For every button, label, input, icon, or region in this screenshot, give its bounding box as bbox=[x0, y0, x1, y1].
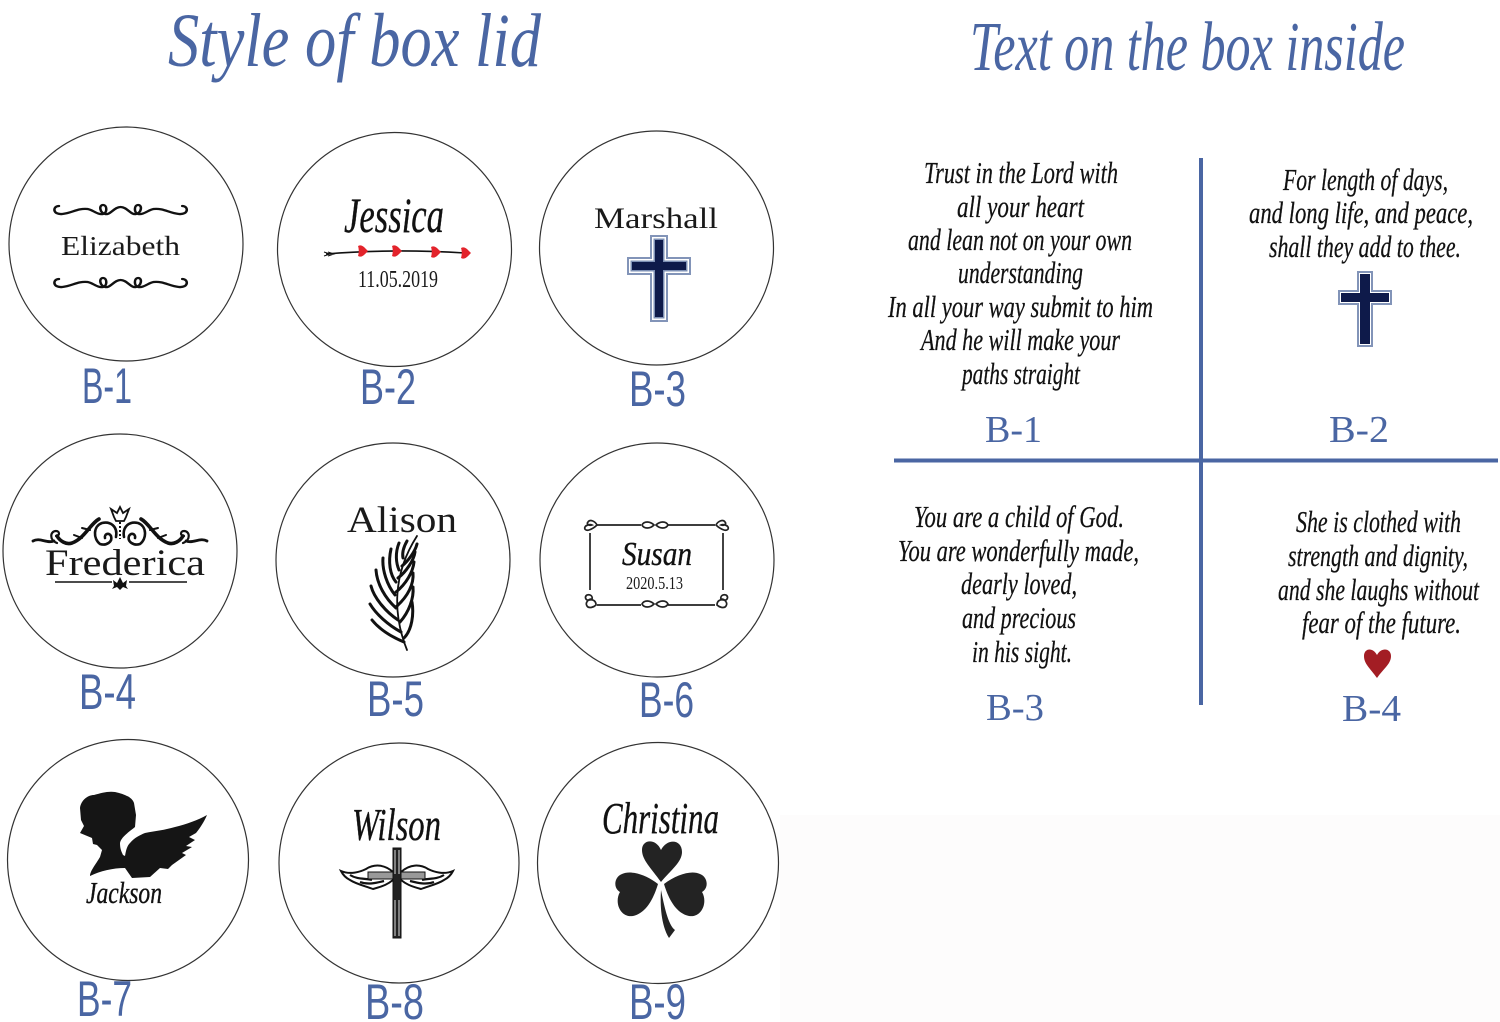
name: Susan bbox=[622, 536, 692, 573]
left wing bbox=[341, 866, 393, 889]
right wing bbox=[401, 866, 453, 889]
lid circle bbox=[3, 434, 237, 668]
verse text: and lean not on your own bbox=[908, 222, 1132, 257]
verse text bbox=[1249, 162, 1473, 264]
icon: angel silhouette bbox=[80, 792, 207, 878]
panel: verse B-2 bbox=[1249, 162, 1473, 451]
panel: lid B-2 bbox=[278, 132, 512, 415]
name: Christina bbox=[602, 794, 719, 843]
panel: lid B-4 bbox=[3, 434, 237, 720]
verse text: dearly loved, bbox=[961, 566, 1077, 601]
panel: verse B-1 bbox=[887, 155, 1153, 451]
bottom flourish bbox=[54, 278, 187, 287]
icon: shamrock bbox=[615, 841, 707, 938]
verse text: paths straight bbox=[961, 356, 1081, 391]
verse text: You are wonderfully made, bbox=[898, 533, 1139, 568]
panel: verse B-3 bbox=[898, 499, 1139, 729]
crown and dots bbox=[111, 507, 129, 539]
icon: palm leaf bbox=[370, 536, 417, 650]
label: B-2 bbox=[360, 359, 416, 415]
feather lines bbox=[350, 875, 444, 884]
verse text: You are a child of God. bbox=[914, 499, 1124, 534]
panel: lid B-5 bbox=[276, 443, 510, 727]
lid circle bbox=[279, 743, 519, 983]
label: B-1 bbox=[985, 409, 1042, 451]
label: B-2 bbox=[1329, 409, 1389, 451]
name: Elizabeth bbox=[61, 231, 181, 261]
icon: cross bbox=[627, 235, 691, 322]
panel: lid B-1 bbox=[9, 127, 243, 414]
name: Frederica bbox=[45, 543, 205, 584]
panel: lid B-6 bbox=[540, 443, 774, 728]
verse text: And he will make your bbox=[920, 322, 1121, 357]
verse text: Trust in the Lord with bbox=[924, 155, 1118, 190]
panel: verse B-4 bbox=[1278, 504, 1480, 730]
panel: lid B-3 bbox=[540, 131, 774, 417]
verse text: all your heart bbox=[957, 189, 1085, 224]
name: Jessica bbox=[344, 187, 444, 243]
label: B-1 bbox=[82, 358, 132, 414]
name: Wilson bbox=[352, 799, 441, 850]
faint off-white lower right area bbox=[780, 815, 1500, 1022]
name: Alison bbox=[347, 500, 457, 541]
verse text: understanding bbox=[958, 255, 1083, 290]
verse text: In all your way submit to him bbox=[887, 289, 1153, 324]
label: B-4 bbox=[79, 664, 136, 720]
verse text bbox=[898, 499, 1139, 669]
label: B-4 bbox=[1342, 688, 1401, 730]
label: B-3 bbox=[629, 361, 686, 417]
lid circle bbox=[540, 443, 774, 677]
date: 2020.5.13 bbox=[626, 573, 683, 593]
cross arm bbox=[368, 872, 425, 879]
right scrolls bbox=[124, 519, 207, 545]
verse text: in his sight. bbox=[972, 634, 1072, 669]
verse text: and precious bbox=[962, 600, 1076, 635]
date: 11.05.2019 bbox=[358, 267, 438, 293]
name: Marshall bbox=[594, 202, 718, 235]
panel: lid B-7 bbox=[8, 740, 248, 1022]
label: B-3 bbox=[986, 687, 1044, 729]
cross upright bbox=[393, 848, 401, 938]
lid circle bbox=[278, 132, 512, 366]
cross highlight bbox=[395, 850, 399, 936]
ornament bbox=[33, 507, 207, 545]
top flourish bbox=[54, 205, 187, 214]
label: B-6 bbox=[639, 672, 694, 728]
panel: lid B-9 bbox=[538, 742, 778, 1022]
lid circle bbox=[538, 742, 778, 984]
panel: lid B-8 bbox=[279, 743, 519, 1022]
left scrolls bbox=[33, 519, 116, 545]
icon: red heart bbox=[1364, 649, 1391, 678]
icon: cross bbox=[1338, 271, 1392, 347]
heading: style of box lid: Style of box lid bbox=[168, 0, 542, 83]
underline ornament bbox=[55, 577, 187, 590]
lid circle bbox=[540, 131, 774, 365]
lid circle bbox=[9, 127, 243, 361]
icon: winged cross bbox=[341, 848, 453, 938]
label: B-5 bbox=[367, 671, 424, 727]
divider lines bbox=[894, 158, 1498, 705]
name: Jackson bbox=[86, 875, 162, 910]
verse text bbox=[887, 155, 1153, 391]
decorative frame bbox=[585, 521, 728, 608]
verse text bbox=[1278, 504, 1480, 640]
arrow with hearts bbox=[324, 245, 471, 259]
lid circle bbox=[8, 740, 248, 980]
lid circle bbox=[276, 443, 510, 677]
